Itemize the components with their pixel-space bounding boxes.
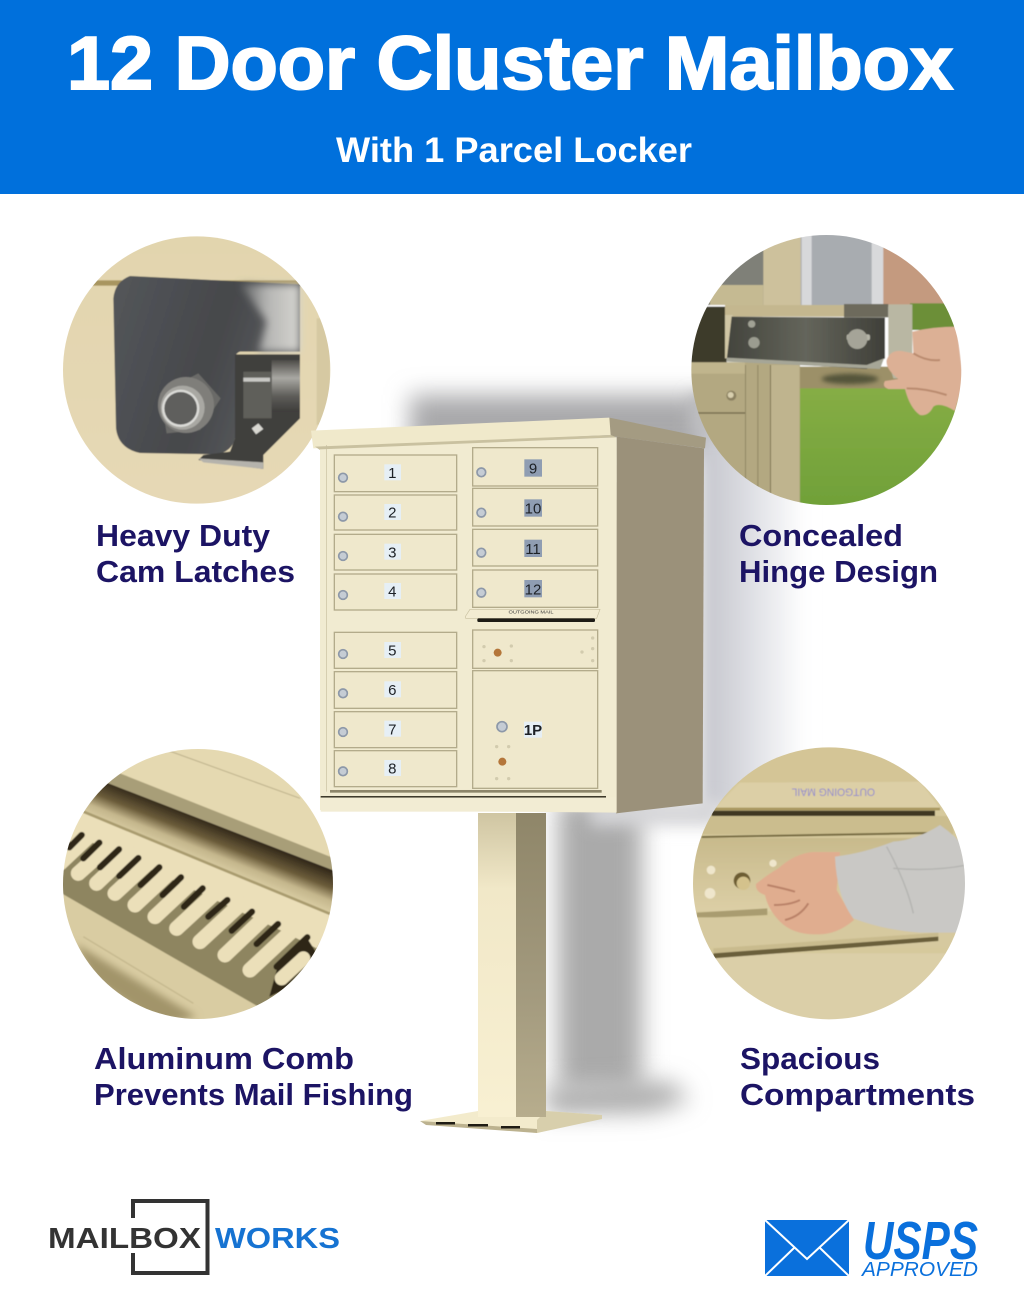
feature label: cam latches: Heavy Duty bbox=[96, 518, 271, 553]
door numbers: 10 bbox=[525, 501, 541, 518]
door numbers: 9 bbox=[529, 460, 537, 477]
door numbers: 11 bbox=[525, 541, 541, 558]
feature label: aluminum comb: Prevents Mail Fishing bbox=[94, 1077, 413, 1112]
logo: Mailbox Works bbox=[48, 1201, 340, 1273]
feature label: spacious compartments bbox=[740, 1041, 975, 1112]
feature label: cam latches: Cam Latches bbox=[96, 554, 295, 589]
door numbers: 5 bbox=[388, 643, 397, 660]
right doors bbox=[473, 448, 598, 788]
door numbers: 7 bbox=[388, 721, 397, 738]
feature label: concealed hinge: Hinge Design bbox=[739, 554, 938, 589]
door locks bbox=[339, 468, 507, 776]
door numbers: 8 bbox=[388, 761, 397, 778]
logo: USPS approved: APPROVED bbox=[861, 1259, 978, 1281]
comb fingers bbox=[60, 835, 293, 970]
icon: envelope bbox=[765, 1220, 849, 1276]
header banner bbox=[0, 0, 1024, 194]
photo circle: cam latch bbox=[63, 236, 330, 504]
outgoing mail slot: OUTGOING MAIL bbox=[508, 610, 554, 615]
door numbers: 6 bbox=[388, 682, 397, 699]
door numbers: 4 bbox=[388, 584, 397, 601]
feature label: spacious compartments: Compartments bbox=[740, 1077, 975, 1112]
cabinet roof bbox=[311, 418, 706, 450]
feature label: aluminum comb bbox=[94, 1041, 413, 1112]
flap lettering: OUTGOING MAIL bbox=[792, 786, 875, 798]
mailbox cast shadow bbox=[410, 395, 805, 1114]
brass locks bbox=[494, 649, 506, 766]
logo: USPS approved: USPS bbox=[863, 1211, 978, 1271]
left doors bbox=[334, 455, 457, 787]
logo: Mailbox Works: WORKS bbox=[215, 1223, 340, 1255]
cabinet side bbox=[616, 437, 704, 813]
title: 12 Door Cluster Mailbox bbox=[67, 21, 953, 105]
logo: Mailbox Works: MAILBOX bbox=[48, 1223, 202, 1255]
feature label: concealed hinge bbox=[739, 518, 938, 589]
cabinet front bbox=[320, 437, 617, 813]
logo: USPS approved bbox=[765, 1211, 978, 1281]
photo circle: aluminum comb bbox=[63, 749, 333, 1019]
door numbers: 2 bbox=[388, 505, 397, 522]
mailbox pedestal bbox=[420, 813, 602, 1133]
feature label: aluminum comb: Aluminum Comb bbox=[94, 1041, 354, 1076]
feature label: cam latches bbox=[96, 518, 295, 589]
mailbox cabinet bbox=[311, 418, 706, 813]
feature label: concealed hinge: Concealed bbox=[739, 518, 903, 553]
comb slots bbox=[69, 835, 307, 967]
door numbers: 3 bbox=[388, 544, 397, 561]
door numbers: 1 bbox=[388, 465, 397, 482]
photo circle: concealed hinge bbox=[691, 235, 962, 505]
outgoing mail slot bbox=[466, 609, 600, 622]
door numbers: 12 bbox=[525, 581, 541, 598]
door rivets bbox=[482, 636, 594, 780]
subtitle: With 1 Parcel Locker bbox=[336, 131, 692, 170]
number plates bbox=[384, 464, 542, 776]
photo circle: spacious compartments bbox=[693, 747, 965, 1020]
feature label: spacious compartments: Spacious bbox=[740, 1041, 880, 1076]
door numbers: 1P bbox=[524, 722, 542, 739]
door numbers bbox=[388, 460, 542, 778]
